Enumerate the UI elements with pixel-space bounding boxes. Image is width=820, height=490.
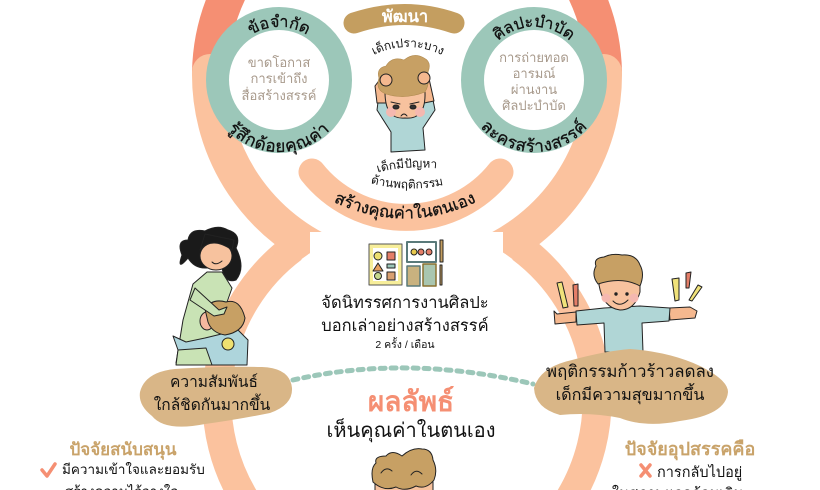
text block: art therapy: ศิลปะบำบัด — [502, 98, 566, 113]
icon: troubled child — [375, 55, 435, 152]
heading: supporting factors: ปัจจัยสนับสนุน — [69, 440, 177, 460]
text block: art exhibition — [321, 294, 489, 351]
label: child with behaviour problems: ด้านพฤติกรรม — [372, 174, 442, 191]
icon: mother hugging child — [173, 227, 248, 365]
text block: art exhibition: บอกเล่าอย่างสร้างสรรค์ — [321, 316, 489, 335]
panel: supporting factors — [42, 440, 205, 490]
heading: feeling of low worth: รู้สึกด้อยคุณค่า — [228, 121, 329, 155]
bubble: closer relationship: ความสัมพันธ์ — [170, 373, 258, 391]
text block: obstacle list: การกลับไปอยู่ — [657, 463, 742, 481]
bubble: closer relationship: ใกล้ชิดกันมากขึ้น — [154, 393, 271, 414]
panel: obstacles — [612, 439, 755, 490]
label: vulnerable child: เด็กเปราะบาง — [372, 38, 444, 54]
heading: obstacles: ปัจจัยอุปสรรคคือ — [625, 439, 755, 461]
text block: obstacle list — [612, 463, 743, 490]
panel: art therapy ring — [461, 7, 607, 153]
icon: cross mark — [641, 465, 650, 476]
banner: develop: พัฒนา — [382, 8, 428, 26]
bubble: less aggressive behaviour: เด็กมีความสุขมากขึ้น — [556, 383, 704, 405]
heading: seeing self worth: เห็นคุณค่าในตนเอง — [327, 417, 495, 443]
heading: creative drama: ละครสร้างสรรค์ — [482, 117, 587, 152]
heading: art therapy: ศิลปะบำบัด — [492, 14, 574, 40]
banner: build self worth: สร้างคุณค่าในตนเอง — [335, 194, 475, 220]
text block: art therapy: อารมณ์ — [513, 66, 555, 81]
bubble: closer relationship — [140, 367, 292, 427]
bubble: less aggressive behaviour: พฤติกรรมก้าวร้าวลดลง — [546, 362, 714, 381]
text block: supporting list — [62, 461, 205, 490]
panel: limitations ring — [206, 7, 352, 155]
banner: develop — [354, 8, 454, 26]
white centre panel — [310, 232, 503, 367]
heading: outcome: ผลลัพธ์ — [368, 386, 454, 417]
icon: art boards — [369, 240, 443, 286]
text block: limitations: ขาดโอกาส — [248, 55, 310, 70]
label: child with behaviour problems: เด็กมีปัญหา — [377, 158, 436, 172]
text block: limitations: การเข้าถึง — [250, 71, 308, 86]
text block: supporting list: มีความเข้าใจและยอมรับ — [62, 461, 205, 477]
icon: child head at bottom — [372, 449, 436, 490]
upper ring: salmon arcs — [210, 0, 604, 72]
upper ring: peach band — [210, 72, 604, 258]
text block: art exhibition: 2 ครั้ง / เดือน — [375, 337, 435, 351]
text block: limitations — [241, 55, 316, 103]
lower ring band — [217, 248, 597, 490]
label: child with behaviour problems — [372, 158, 442, 191]
text block: limitations: สื่อสร้างสรรค์ — [241, 87, 316, 103]
text block: art exhibition: จัดนิทรรศการงานศิลปะ — [321, 294, 489, 312]
text block: art therapy — [499, 50, 569, 113]
icon: happy child — [554, 254, 702, 352]
heading: limitations: ข้อจำกัด — [248, 14, 309, 34]
text block: art therapy: การถ่ายทอด — [499, 50, 569, 65]
dotted connector — [293, 368, 533, 384]
text block: art therapy: ผ่านงาน — [511, 82, 557, 97]
banner: build self worth — [298, 158, 514, 231]
bubble: less aggressive behaviour — [534, 349, 728, 424]
lower ring interior — [231, 224, 583, 490]
icon: check mark — [42, 464, 55, 476]
